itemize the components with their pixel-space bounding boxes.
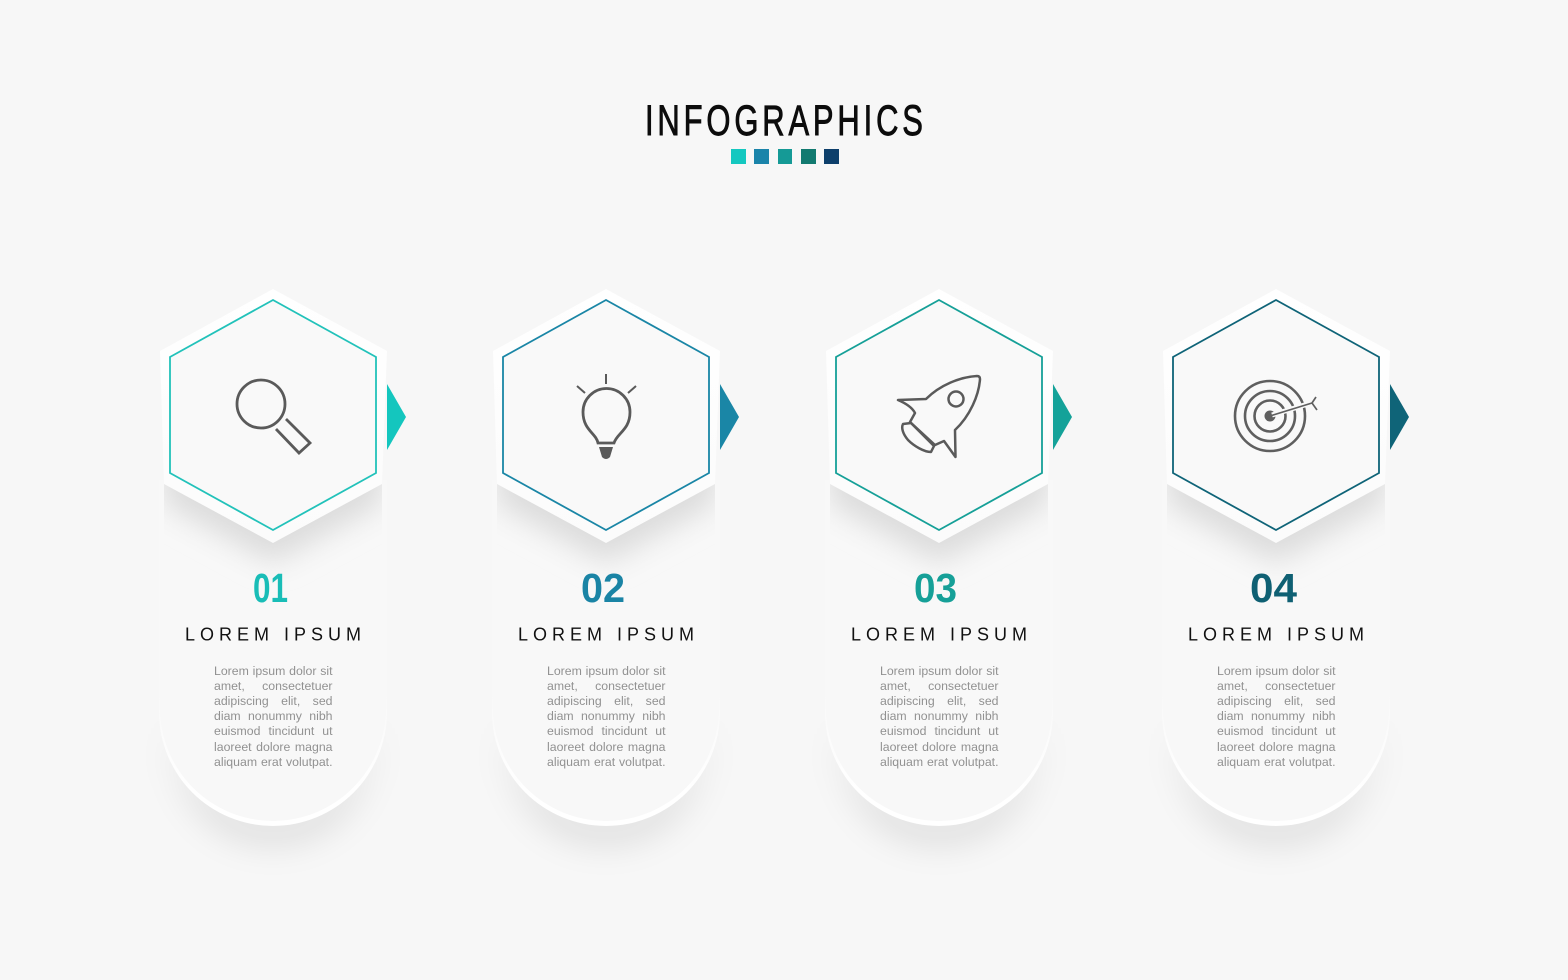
heading: LOREM IPSUM bbox=[185, 624, 361, 644]
text block: aliquam erat volutpat. bbox=[1217, 755, 1336, 769]
icon: magnifier bbox=[237, 380, 310, 453]
text block: diam nonummy nibh bbox=[214, 709, 332, 723]
text block: euismod tincidunt ut bbox=[1217, 724, 1336, 738]
text block: laoreet dolore magna bbox=[880, 740, 998, 754]
colour swatches bbox=[731, 149, 839, 164]
panel: step 01 bbox=[164, 299, 406, 851]
icon: light bulb bbox=[577, 374, 636, 459]
arrow bbox=[387, 384, 406, 450]
text block: adipiscing elit, sed bbox=[880, 694, 998, 708]
text block: diam nonummy nibh bbox=[1217, 709, 1336, 723]
hexagon outline bbox=[836, 300, 1042, 530]
text block: adipiscing elit, sed bbox=[1217, 694, 1336, 708]
panel: step 04 bbox=[1167, 299, 1409, 851]
heading: LOREM IPSUM bbox=[518, 624, 694, 644]
number: 03 bbox=[914, 565, 957, 611]
text block: amet, consectetuer bbox=[880, 679, 998, 693]
title: INFOGRAPHICS bbox=[645, 96, 923, 144]
text block bbox=[1217, 664, 1336, 769]
text block: adipiscing elit, sed bbox=[547, 694, 666, 708]
text block: Lorem ipsum dolor sit bbox=[214, 664, 332, 678]
text block: Lorem ipsum dolor sit bbox=[547, 664, 666, 678]
icon: rocket bbox=[898, 376, 980, 457]
text block: amet, consectetuer bbox=[1217, 679, 1336, 693]
text block: Lorem ipsum dolor sit bbox=[880, 664, 998, 678]
text block: aliquam erat volutpat. bbox=[214, 755, 332, 769]
hexagon outline bbox=[170, 300, 376, 530]
text block: aliquam erat volutpat. bbox=[547, 755, 666, 769]
hexagon outline bbox=[503, 300, 709, 530]
number: 04 bbox=[1250, 565, 1297, 611]
heading: LOREM IPSUM bbox=[851, 624, 1027, 644]
number: 02 bbox=[581, 565, 625, 611]
hexagon outline bbox=[1173, 300, 1379, 530]
panel: step 02 bbox=[497, 299, 739, 851]
text block: euismod tincidunt ut bbox=[880, 724, 998, 738]
text block: euismod tincidunt ut bbox=[547, 724, 666, 738]
number: 01 bbox=[253, 565, 288, 611]
text block: amet, consectetuer bbox=[547, 679, 666, 693]
text block bbox=[880, 664, 998, 769]
arrow bbox=[720, 384, 739, 450]
text block: aliquam erat volutpat. bbox=[880, 755, 998, 769]
text block: euismod tincidunt ut bbox=[214, 724, 332, 738]
text block: Lorem ipsum dolor sit bbox=[1217, 664, 1336, 678]
text block: laoreet dolore magna bbox=[1217, 740, 1336, 754]
text block: adipiscing elit, sed bbox=[214, 694, 332, 708]
icon: target bbox=[1235, 381, 1317, 451]
text block: laoreet dolore magna bbox=[214, 740, 332, 754]
arrow bbox=[1053, 384, 1072, 450]
panel: step 03 bbox=[830, 299, 1072, 851]
text block: diam nonummy nibh bbox=[880, 709, 998, 723]
text block: diam nonummy nibh bbox=[547, 709, 666, 723]
text block: laoreet dolore magna bbox=[547, 740, 666, 754]
heading: LOREM IPSUM bbox=[1188, 624, 1364, 644]
text block bbox=[547, 664, 666, 769]
text block: amet, consectetuer bbox=[214, 679, 332, 693]
text block bbox=[214, 664, 332, 769]
arrow bbox=[1390, 384, 1409, 450]
